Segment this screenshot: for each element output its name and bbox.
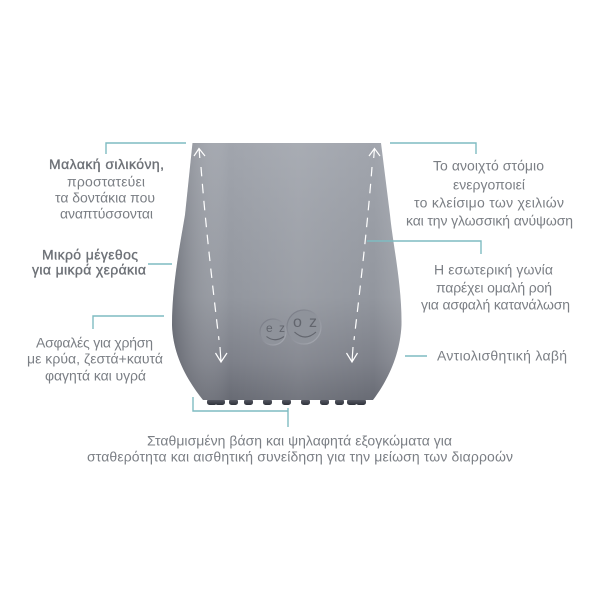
callout: soft silicone: αναπτύσσονται bbox=[60, 206, 153, 222]
callout: inner angle: Η εσωτερική γωνία bbox=[434, 262, 553, 278]
callout: small size: για μικρά χεράκια bbox=[32, 262, 146, 278]
cup shading bbox=[172, 143, 402, 400]
callout: anti-slip grip: Αντιολισθητική λαβή bbox=[437, 348, 567, 364]
callout: soft silicone: Μαλακή σιλικόνη, bbox=[49, 156, 164, 172]
callout: weighted base: Σταθμισμένη βάση και ψηλαφητά εξογκώματα για bbox=[147, 432, 452, 448]
callout: open mouth: ενεργοποιεί bbox=[453, 176, 525, 192]
callout: open mouth: το κλείσιμο των χειλιών bbox=[414, 194, 564, 210]
callout: weighted base: σταθερότητα και αισθητική συνείδηση για την μείωση των διαρροών bbox=[87, 448, 513, 464]
callout: soft silicone: προστατεύει bbox=[67, 174, 145, 190]
callout: safe use: φαγητά και υγρά bbox=[45, 368, 146, 384]
callout: inner angle: παρέχει ομαλή ροή bbox=[436, 280, 552, 296]
right dashed arrow bbox=[346, 148, 380, 362]
cup feet bbox=[207, 399, 366, 405]
cup illustration bbox=[172, 143, 402, 405]
callout: small size: Μικρό μέγεθος bbox=[42, 246, 138, 262]
callout: inner angle bbox=[367, 241, 570, 312]
logo bbox=[260, 310, 321, 345]
callout: open mouth: Το ανοιχτό στόμιο bbox=[433, 158, 544, 174]
logo: ez: e z bbox=[266, 321, 285, 335]
callout: weighted base bbox=[87, 397, 513, 464]
left dashed arrow bbox=[194, 148, 227, 362]
callout: safe use: με κρύα, ζεστά+καυτά bbox=[27, 350, 163, 366]
callout: open mouth bbox=[390, 143, 573, 228]
callout: soft silicone bbox=[49, 143, 186, 222]
logo: oz: o z bbox=[293, 314, 317, 331]
callout: safe use bbox=[27, 316, 164, 384]
callout: open mouth: και την γλωσσική ανύψωση bbox=[406, 212, 573, 228]
callout: small size bbox=[32, 246, 172, 278]
callout: soft silicone: τα δοντάκια που bbox=[55, 190, 155, 206]
cup body bbox=[172, 143, 402, 400]
callout: inner angle: για ασφαλή κατανάλωση bbox=[421, 296, 570, 312]
callout: safe use: Ασφαλές για χρήση bbox=[36, 334, 153, 350]
